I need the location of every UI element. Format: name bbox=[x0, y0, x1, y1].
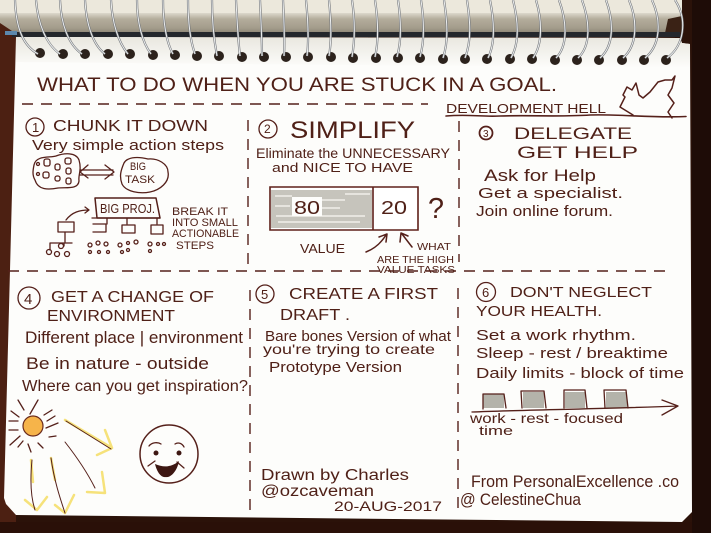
panel: change of environment bbox=[9, 287, 248, 513]
text block: environment ideas bbox=[22, 328, 248, 395]
note: break it into small steps: BREAK IT bbox=[172, 206, 228, 218]
big task cloud: BIG bbox=[130, 161, 146, 173]
text block: draft description bbox=[263, 329, 451, 376]
heading: GET A CHANGE OF bbox=[51, 289, 214, 306]
panel: simplify bbox=[256, 117, 455, 276]
notebook binding band bbox=[0, 13, 682, 37]
timeline label bbox=[469, 410, 623, 438]
number 4 bbox=[18, 287, 40, 309]
timeline: work blocks bbox=[472, 390, 678, 415]
text block: rhythm: Set a work rhythm. bbox=[476, 328, 636, 344]
panel: delegate bbox=[476, 125, 638, 220]
number 2 bbox=[259, 120, 277, 138]
note: high value tasks bbox=[377, 241, 455, 276]
arrows to the 20 section bbox=[366, 233, 412, 252]
timeline label: work - rest - focused bbox=[469, 410, 623, 426]
text block: ways to get help bbox=[476, 166, 623, 220]
icon: sun with rays bbox=[9, 400, 58, 452]
note: high value tasks: WHAT bbox=[417, 241, 452, 253]
heading: SIMPLIFY bbox=[290, 117, 415, 144]
chart: 80/20 bar: 20 bbox=[381, 198, 407, 218]
big project box: BIG PROJ. bbox=[100, 201, 155, 216]
note: high value tasks: VALUE TASKS bbox=[377, 264, 455, 276]
heading: CHUNK IT DOWN bbox=[53, 118, 208, 135]
number 1 bbox=[26, 118, 44, 136]
number 6 bbox=[476, 282, 496, 302]
icon: small tasks cloud bbox=[33, 154, 80, 189]
heading: DON'T NEGLECT bbox=[510, 284, 652, 301]
number 3 bbox=[480, 126, 492, 140]
text block: environment ideas: Be in nature - outside bbox=[26, 354, 209, 373]
dashed dividers bbox=[8, 104, 668, 510]
number 3: 3 bbox=[483, 129, 489, 140]
number 6: 6 bbox=[482, 285, 489, 300]
credit: from personal excellence: @ CelestineChua bbox=[460, 491, 582, 509]
big task cloud bbox=[121, 158, 168, 193]
credit: drawn by: Drawn by Charles bbox=[261, 467, 409, 484]
big project box bbox=[95, 198, 160, 218]
number 5: 5 bbox=[261, 287, 268, 302]
credit: drawn by: 20-AUG-2017 bbox=[334, 498, 442, 514]
text block: draft description: Prototype Version bbox=[269, 360, 402, 376]
big task cloud: TASK bbox=[125, 174, 156, 186]
panel: health bbox=[460, 282, 684, 509]
text block: ways to get help: Join online forum. bbox=[476, 203, 613, 220]
credit: drawn by bbox=[261, 467, 442, 514]
text block: rhythm bbox=[476, 328, 684, 382]
chart: 80/20 bar: 80 bbox=[294, 198, 320, 218]
note: break it into small steps: ACTIONABLE bbox=[172, 228, 239, 240]
panel: first draft bbox=[256, 285, 451, 514]
axis label: value: VALUE bbox=[300, 241, 345, 256]
credit: drawn by: @ozcaveman bbox=[261, 483, 374, 500]
panel: health: YOUR HEALTH. bbox=[476, 303, 602, 320]
panel: delegate: GET HELP bbox=[517, 144, 638, 162]
text block: environment ideas: Different place | environment bbox=[25, 328, 243, 347]
spiral wire rings bbox=[15, 0, 683, 58]
number 2: 2 bbox=[264, 122, 271, 136]
panel: simplify: and NICE TO HAVE bbox=[272, 160, 413, 175]
text block: environment ideas: Where can you get inspiration? bbox=[22, 378, 248, 395]
number 5 bbox=[256, 285, 274, 303]
spiral holes bbox=[35, 48, 671, 65]
icon: hell flames bbox=[446, 76, 686, 118]
credit: from personal excellence bbox=[460, 473, 679, 509]
timeline label: time bbox=[479, 423, 513, 438]
note: break it into small steps: STEPS bbox=[176, 240, 214, 252]
text block: draft description: you're trying to create bbox=[263, 341, 435, 357]
question mark: ? bbox=[428, 193, 444, 225]
panel: change of environment: ENVIRONMENT bbox=[47, 308, 176, 325]
text block: ways to get help: Get a specialist. bbox=[478, 185, 623, 202]
credit: from personal excellence: From PersonalExcellence .co bbox=[471, 473, 679, 491]
number 4: 4 bbox=[24, 291, 32, 308]
text block: rhythm: Sleep - rest / breaktime bbox=[476, 346, 668, 362]
subheading: Eliminate the UNNECESSARY bbox=[256, 146, 450, 161]
panel: first draft: DRAFT . bbox=[280, 307, 350, 324]
chart: 80/20 bar bbox=[270, 187, 418, 230]
icon: smiley face bbox=[140, 425, 198, 483]
heading: DELEGATE bbox=[514, 125, 632, 143]
arrow: equals bbox=[80, 165, 114, 179]
subtitle: development hell: DEVELOPMENT HELL bbox=[446, 102, 606, 116]
panel: chunk it down bbox=[26, 118, 239, 256]
text block: draft description: Bare bones Version of what bbox=[265, 329, 451, 345]
heading: CREATE A FIRST bbox=[289, 286, 439, 303]
number 1: 1 bbox=[32, 120, 39, 135]
note: break it into small steps: INTO SMALL bbox=[172, 217, 238, 229]
icon: sun beams bbox=[25, 420, 112, 513]
text block: ways to get help: Ask for Help bbox=[484, 166, 596, 185]
diagram: task hierarchy bbox=[46, 207, 166, 256]
subheading: Very simple action steps bbox=[32, 137, 224, 154]
note: break it into small steps bbox=[172, 206, 239, 252]
note: high value tasks: ARE THE HIGH bbox=[377, 254, 454, 266]
title: WHAT TO DO WHEN YOU ARE STUCK IN A GOAL. bbox=[37, 75, 557, 96]
text block: rhythm: Daily limits - block of time bbox=[476, 366, 684, 382]
